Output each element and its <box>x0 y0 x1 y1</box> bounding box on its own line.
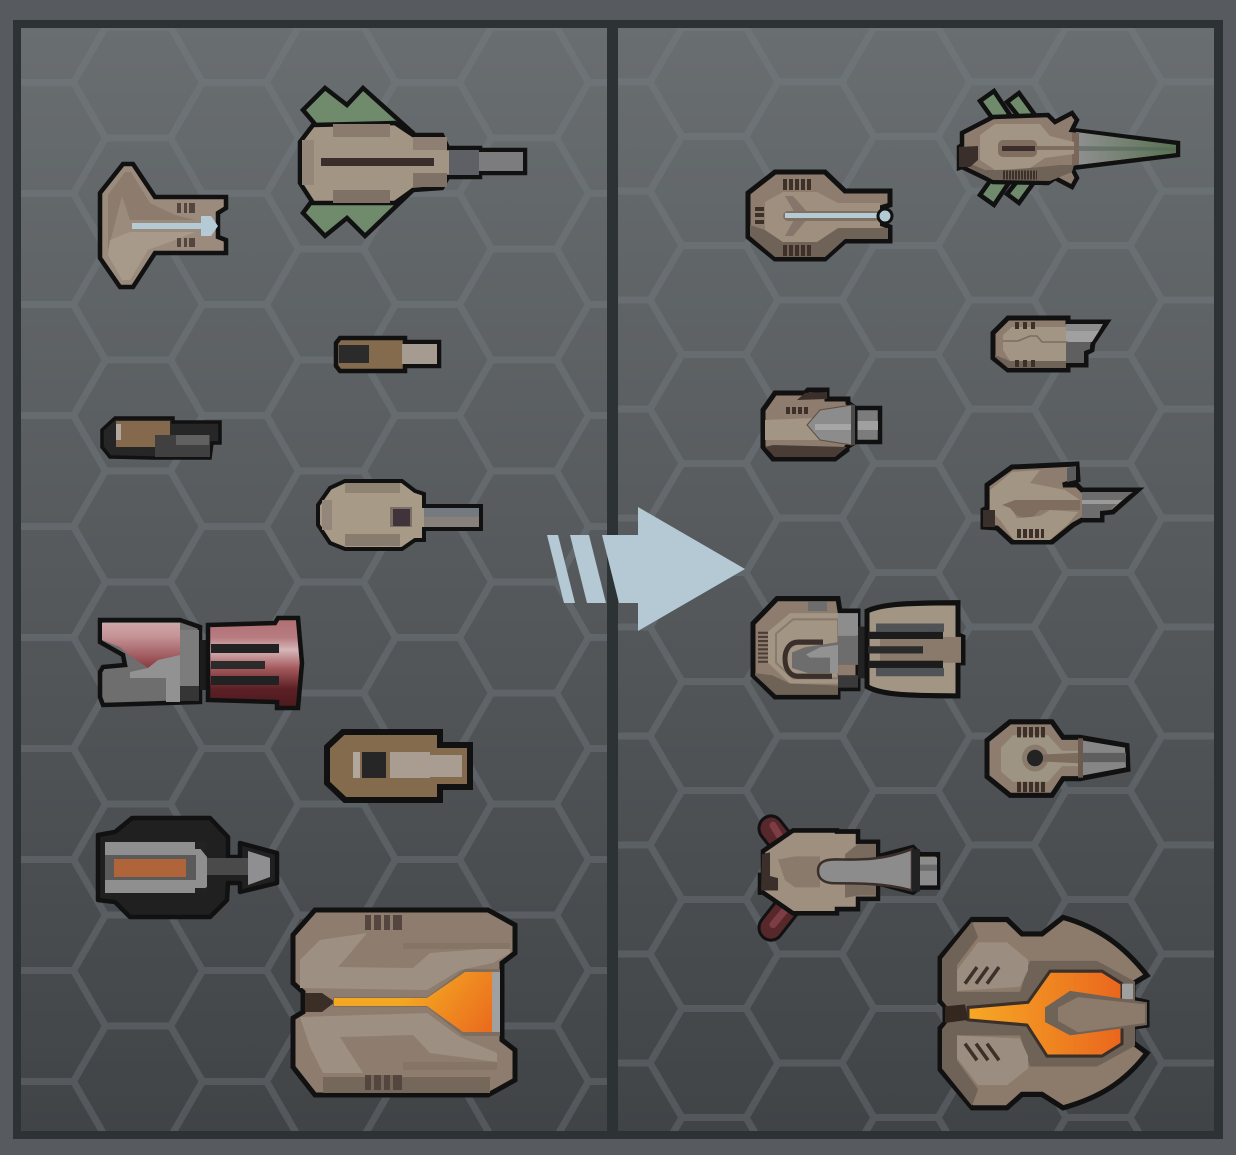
left ship: green-winged cannon <box>300 88 525 236</box>
arrow: transition from old to new <box>547 507 745 631</box>
left ship: brown rectangular turret <box>327 732 470 800</box>
right ship: red-knob barrel cannon <box>760 825 938 928</box>
right ship: large gatling gun <box>753 599 963 697</box>
left ship: blue-core fighter <box>100 164 226 287</box>
right ship: winged cannon mid <box>983 464 1138 542</box>
left ship: red gatling gun <box>100 618 302 708</box>
left ship: brown and dark turret <box>102 418 220 458</box>
right ship: cone nose turret <box>763 390 880 459</box>
right ship: green-finned spike <box>959 91 1178 205</box>
left ship: rounded beige turret <box>318 481 481 549</box>
right ship: octagonal black-eye turret <box>987 722 1128 795</box>
panel: right redesigned sprites background <box>618 28 1214 1131</box>
right ship: small winged turret <box>993 318 1107 370</box>
right ship: blue-core fighter <box>748 172 892 259</box>
left ship: small brown turret <box>336 338 439 371</box>
right ship: large fire-core warship <box>940 917 1147 1108</box>
left ship: black orange-core turret <box>98 818 277 917</box>
panel: left original sprites background <box>21 28 607 1131</box>
left ship: large tan fire cannon <box>293 910 515 1095</box>
